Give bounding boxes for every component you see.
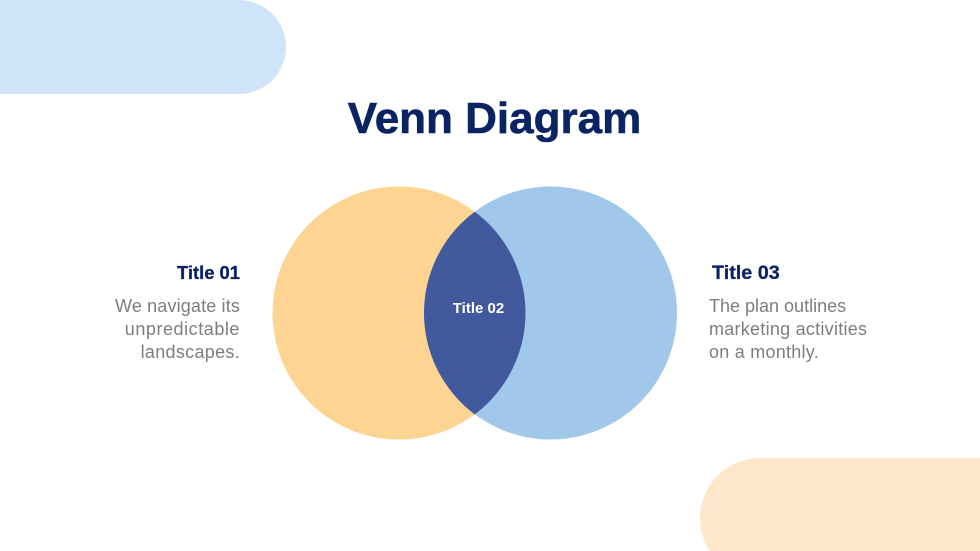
body text: left: unpredictable bbox=[125, 319, 240, 339]
right text block bbox=[709, 262, 867, 362]
decorative shape: bottom right pill bbox=[700, 458, 980, 551]
body text: left bbox=[115, 296, 240, 362]
title: Venn Diagram bbox=[348, 94, 641, 143]
heading: title 01: Title 01 bbox=[177, 262, 240, 283]
body text: right: The plan outlines bbox=[709, 296, 846, 316]
body text: right: marketing activities bbox=[709, 319, 867, 339]
overlap label: Title 02 bbox=[453, 300, 504, 317]
body text: right: on a monthly. bbox=[709, 342, 819, 362]
body text: left: We navigate its bbox=[115, 296, 240, 316]
venn diagram bbox=[272, 186, 677, 440]
circle: left bbox=[272, 186, 526, 440]
left text block bbox=[115, 262, 240, 362]
body text: right bbox=[709, 296, 867, 362]
body text: left: landscapes. bbox=[141, 342, 240, 362]
decorative shape: top left pill bbox=[0, 0, 286, 94]
overlap bbox=[424, 212, 526, 414]
heading: title 03: Title 03 bbox=[712, 262, 780, 284]
circle: right bbox=[424, 186, 677, 440]
